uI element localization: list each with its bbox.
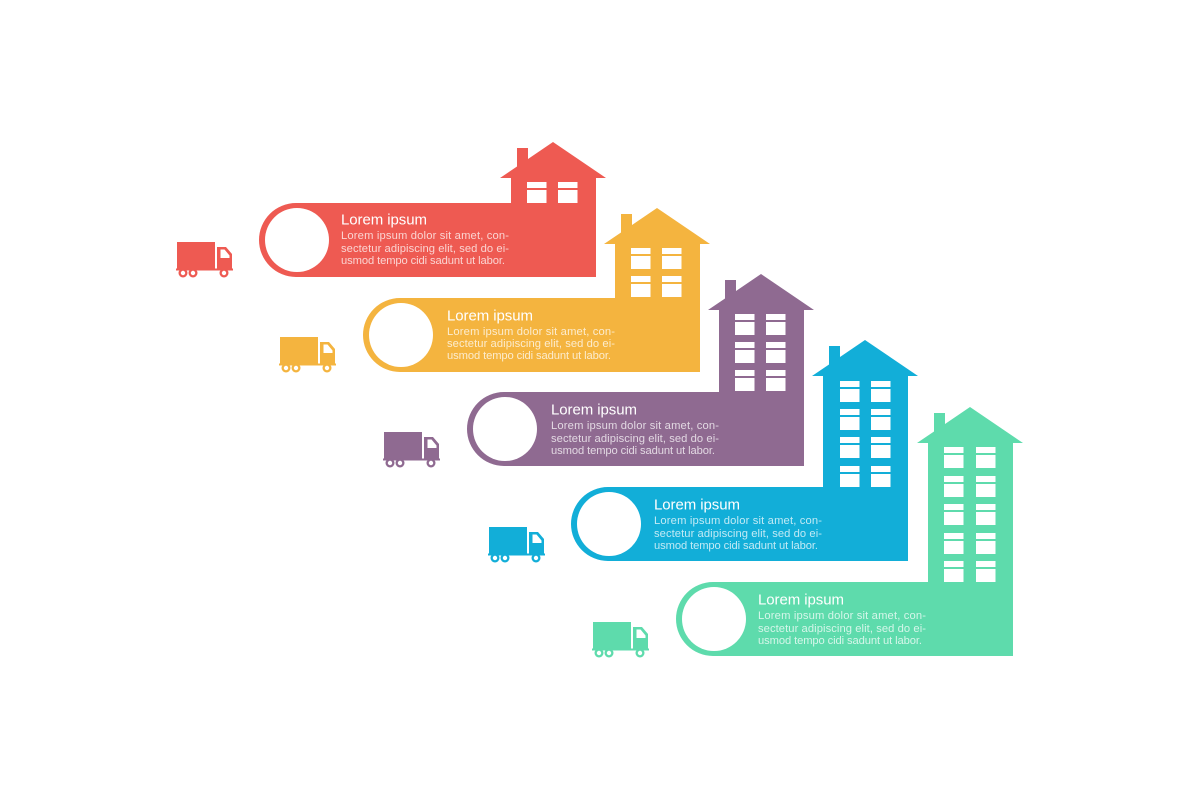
body text: usmod tempo cidi sadunt ut labor. <box>447 350 611 362</box>
body text: usmod tempo cidi sadunt ut labor. <box>758 635 922 647</box>
panel: step 4 blue house <box>571 340 918 561</box>
heading: Lorem ipsum <box>551 402 637 418</box>
body text: usmod tempo cidi sadunt ut labor. <box>654 540 818 552</box>
body text <box>654 515 822 552</box>
icon: blue truck <box>488 527 545 562</box>
icon placeholder circle <box>265 208 329 272</box>
heading: Lorem ipsum <box>447 308 533 324</box>
body text: Lorem ipsum dolor sit amet, con- <box>758 610 926 622</box>
body text: sectetur adipiscing elit, sed do ei- <box>341 243 509 255</box>
banner and house shape <box>259 142 606 277</box>
icon placeholder circle <box>369 303 433 367</box>
body text <box>447 326 615 362</box>
body text: sectetur adipiscing elit, sed do ei- <box>447 338 615 350</box>
panel: step 2 orange house <box>363 208 710 372</box>
body text: Lorem ipsum dolor sit amet, con- <box>341 230 509 242</box>
panel: step 5 green house <box>676 407 1023 656</box>
icon: red truck <box>176 242 233 278</box>
banner and house shape <box>467 274 814 466</box>
heading: Lorem ipsum <box>341 212 427 228</box>
panel: step 1 red house <box>259 142 606 277</box>
icon placeholder circle <box>682 587 746 651</box>
body text: Lorem ipsum dolor sit amet, con- <box>551 420 719 432</box>
banner and house shape <box>676 407 1023 656</box>
body text <box>341 230 509 267</box>
heading: Lorem ipsum <box>654 496 740 514</box>
body text: Lorem ipsum dolor sit amet, con- <box>447 326 615 338</box>
body text <box>758 610 926 647</box>
icon: orange truck <box>279 337 336 372</box>
house windows <box>840 381 890 487</box>
banner and house shape <box>571 340 918 561</box>
house windows <box>735 314 786 391</box>
banner and house shape <box>363 208 710 372</box>
body text: Lorem ipsum dolor sit amet, con- <box>654 515 822 527</box>
icon placeholder circle <box>577 492 641 556</box>
body text: usmod tempo cidi sadunt ut labor. <box>551 445 715 457</box>
icon: purple truck <box>383 432 440 468</box>
panel: step 3 purple house <box>467 274 814 466</box>
icon: green truck <box>592 622 649 658</box>
icon placeholder circle <box>473 397 537 461</box>
body text: usmod tempo cidi sadunt ut labor. <box>341 255 505 267</box>
body text: sectetur adipiscing elit, sed do ei- <box>551 433 719 445</box>
house windows <box>631 248 682 297</box>
house windows <box>527 182 578 203</box>
heading: Lorem ipsum <box>758 592 844 608</box>
body text: sectetur adipiscing elit, sed do ei- <box>758 623 926 635</box>
body text: sectetur adipiscing elit, sed do ei- <box>654 528 822 540</box>
body text <box>551 420 719 457</box>
house windows <box>944 447 996 582</box>
